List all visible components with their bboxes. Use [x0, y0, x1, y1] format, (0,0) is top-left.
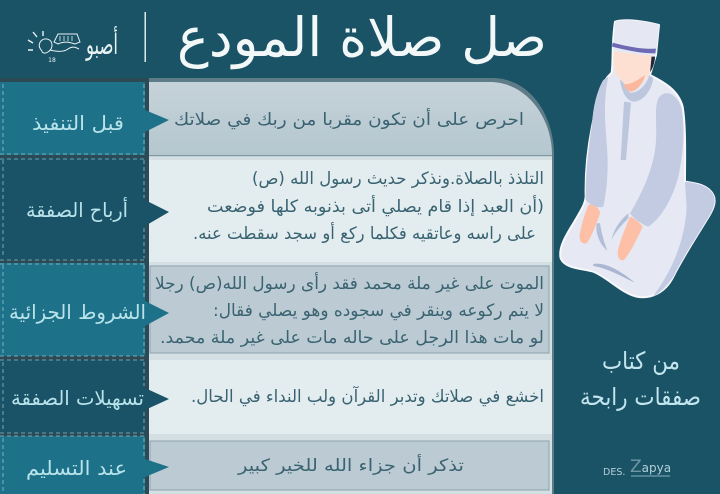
tab: deal profits: أرباح الصفقة [26, 197, 128, 222]
tab: deal facilities: تسهيلات الصفقة [11, 386, 144, 410]
panel: row 3 content: لو مات هذا الرجل على حاله مات على غير ملة محمد. [160, 328, 544, 348]
panel: row 1 content: احرص على أن تكون مقربا من ربك في صلاتك [174, 108, 524, 130]
designer credit: DES. [603, 467, 625, 478]
panel: row 3 content [150, 266, 549, 353]
panel: row 2 content: التلذذ بالصلاة.ونذكر حديث رسول الله (ص) [252, 169, 544, 189]
panel: row 3 content: الموت على غير ملة محمد فقد رأى رسول الله(ص) رجلا [155, 272, 544, 294]
icon: praying man [560, 20, 715, 297]
designer credit: Zapya [630, 457, 671, 477]
source caption: صفقات رابحة [580, 383, 701, 411]
source caption: من كتاب [602, 347, 680, 375]
title: صل صلاة المودع [177, 6, 547, 69]
panel: row 3 content: لا يتم ركوعه وينقر في سجوده وهو يصلي فقال: [213, 301, 544, 321]
left column shadow [0, 78, 149, 494]
panel: row 5 content: تذكر أن جزاء الله للخير كبير [237, 454, 464, 476]
panel: row 2 content: (أن العبد إذا قام يصلي أتى بذنوبه كلها فوضعت [207, 195, 544, 217]
tab: penalty terms: الشروط الجزائية [9, 300, 146, 324]
logo [28, 25, 118, 64]
tab: at delivery: عند التسليم [26, 456, 127, 480]
content panel edge [146, 78, 554, 494]
tab: deal facilities [0, 360, 169, 433]
logo: أصبو [85, 25, 118, 61]
panel: row 2 content: على راسه وعاتقيه فكلما ركع أو سجد سقطت عنه. [193, 222, 536, 244]
logo: 18 [48, 57, 56, 64]
panel: row 1 content [149, 82, 552, 156]
panel: row 4 content [149, 360, 552, 434]
tab: deal profits [0, 158, 169, 260]
panel: row 5 content [150, 441, 549, 490]
source caption [580, 347, 701, 411]
panel: row 2 content [149, 160, 552, 262]
panel: row 4 content: اخشع في صلاتك وتدبر القرآن ولب النداء في الحال. [191, 385, 544, 407]
tab: at delivery [0, 436, 169, 494]
tab: penalty terms [0, 263, 169, 356]
tab: before execution [0, 82, 169, 155]
tab: before execution: قبل التنفيذ [32, 111, 124, 135]
designer credit [603, 457, 671, 478]
